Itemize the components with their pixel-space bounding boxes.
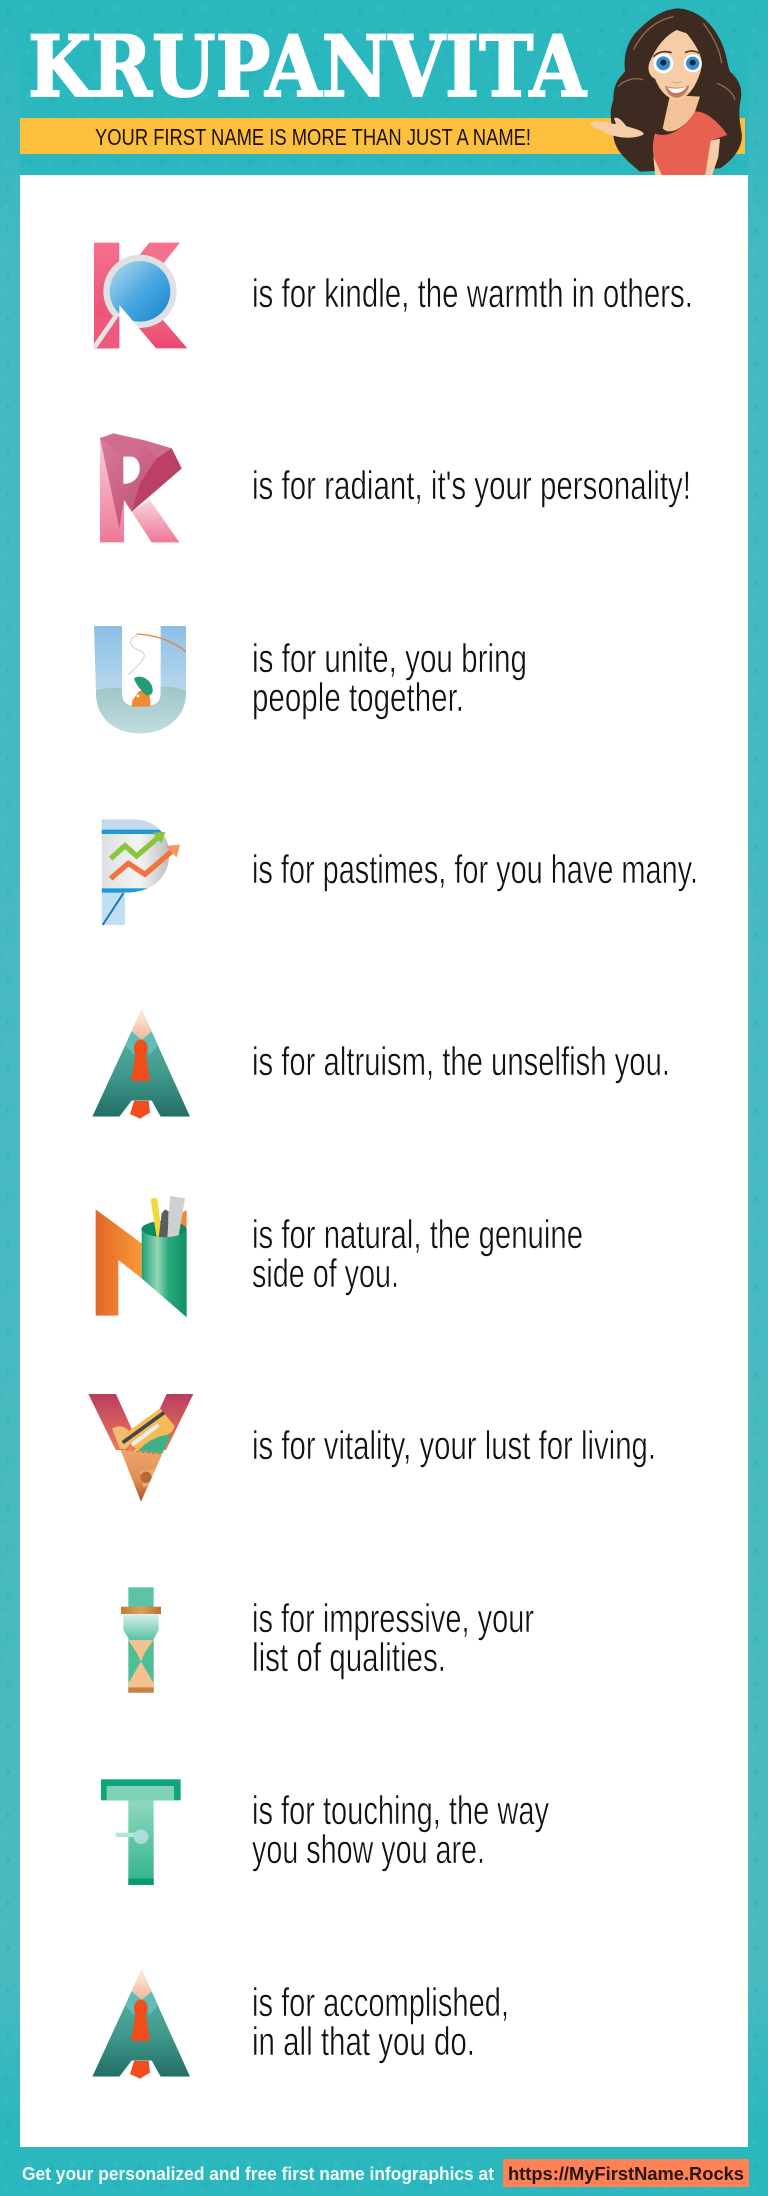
letter icon: R: [100, 433, 182, 542]
text: A line 2: is for accomplished,: [252, 1981, 509, 2025]
letter icon: P: [100, 818, 180, 926]
letter icon: K: [94, 243, 187, 348]
character illustration: [590, 8, 742, 177]
letter icon: N: [96, 1196, 187, 1317]
footer text: Get your personalized and free first name infographics at: [22, 2164, 494, 2184]
text: T line: [252, 1789, 549, 1872]
letter icon: A: [90, 1968, 192, 2079]
text: N line: side of you.: [252, 1252, 399, 1296]
text: A line 2: in all that you do.: [252, 2020, 475, 2064]
tagline banner: YOUR FIRST NAME IS MORE THAN JUST A NAME!: [95, 124, 531, 150]
text: I line: [252, 1597, 534, 1680]
letter icon: V: [88, 1393, 194, 1503]
text: T line: you show you are.: [252, 1828, 485, 1872]
tagline banner: [20, 118, 745, 154]
letter icon: T: [101, 1779, 181, 1885]
text: U line: is for unite, you bring: [252, 637, 527, 681]
text: N line: [252, 1213, 583, 1296]
footer url badge: [503, 2159, 749, 2187]
text: T line: is for touching, the way: [252, 1789, 549, 1833]
letter icon: I: [121, 1587, 161, 1693]
text: A line 2: [252, 1981, 509, 2064]
text: U line: people together.: [252, 676, 464, 720]
text: I line: is for impressive, your: [252, 1597, 534, 1641]
title: KRUPANVITA: [28, 17, 588, 116]
text: N line: is for natural, the genuine: [252, 1213, 583, 1257]
footer url badge: https://MyFirstName.Rocks: [508, 2164, 744, 2184]
text: I line: list of qualities.: [252, 1636, 446, 1680]
letter icon: A: [90, 1008, 192, 1119]
text: U line: [252, 637, 527, 720]
letter icon: U: [93, 626, 187, 736]
